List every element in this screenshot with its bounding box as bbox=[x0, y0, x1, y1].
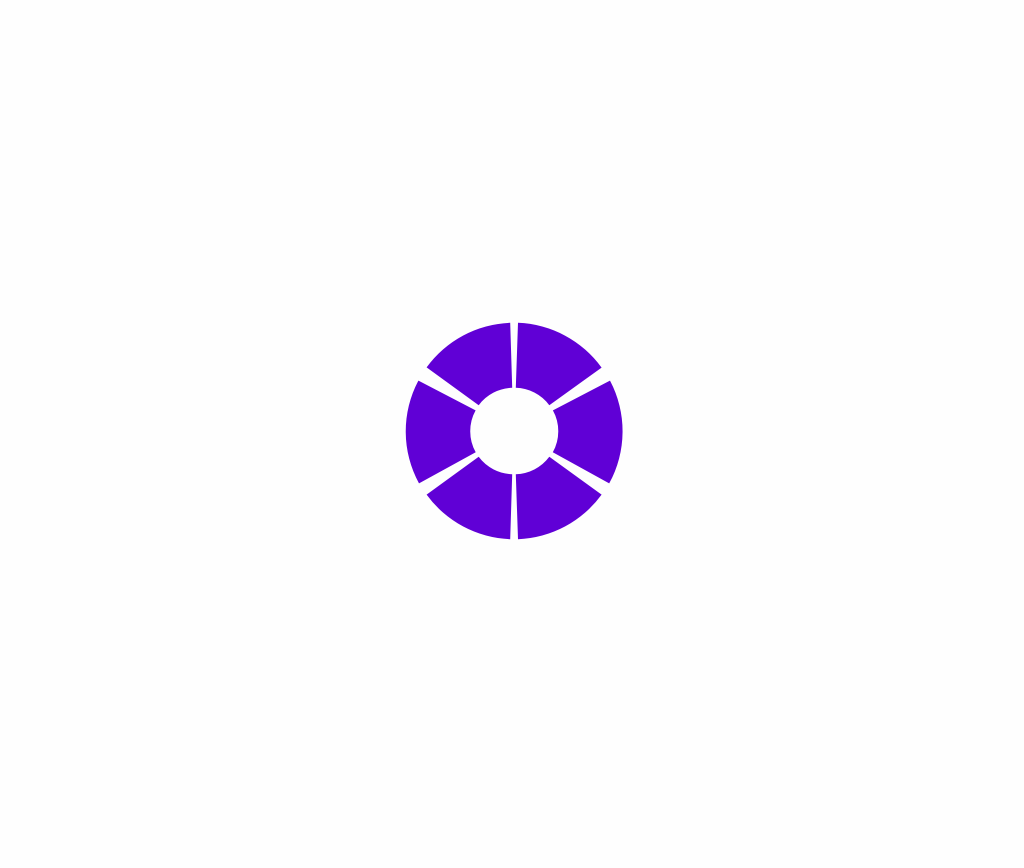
segment: left bbox=[406, 381, 476, 483]
segment: top right bbox=[516, 323, 602, 405]
segment: top left bbox=[427, 323, 512, 405]
segment: right bbox=[553, 381, 623, 483]
segment: bottom right bbox=[516, 457, 602, 539]
segment: bottom left bbox=[427, 457, 512, 539]
